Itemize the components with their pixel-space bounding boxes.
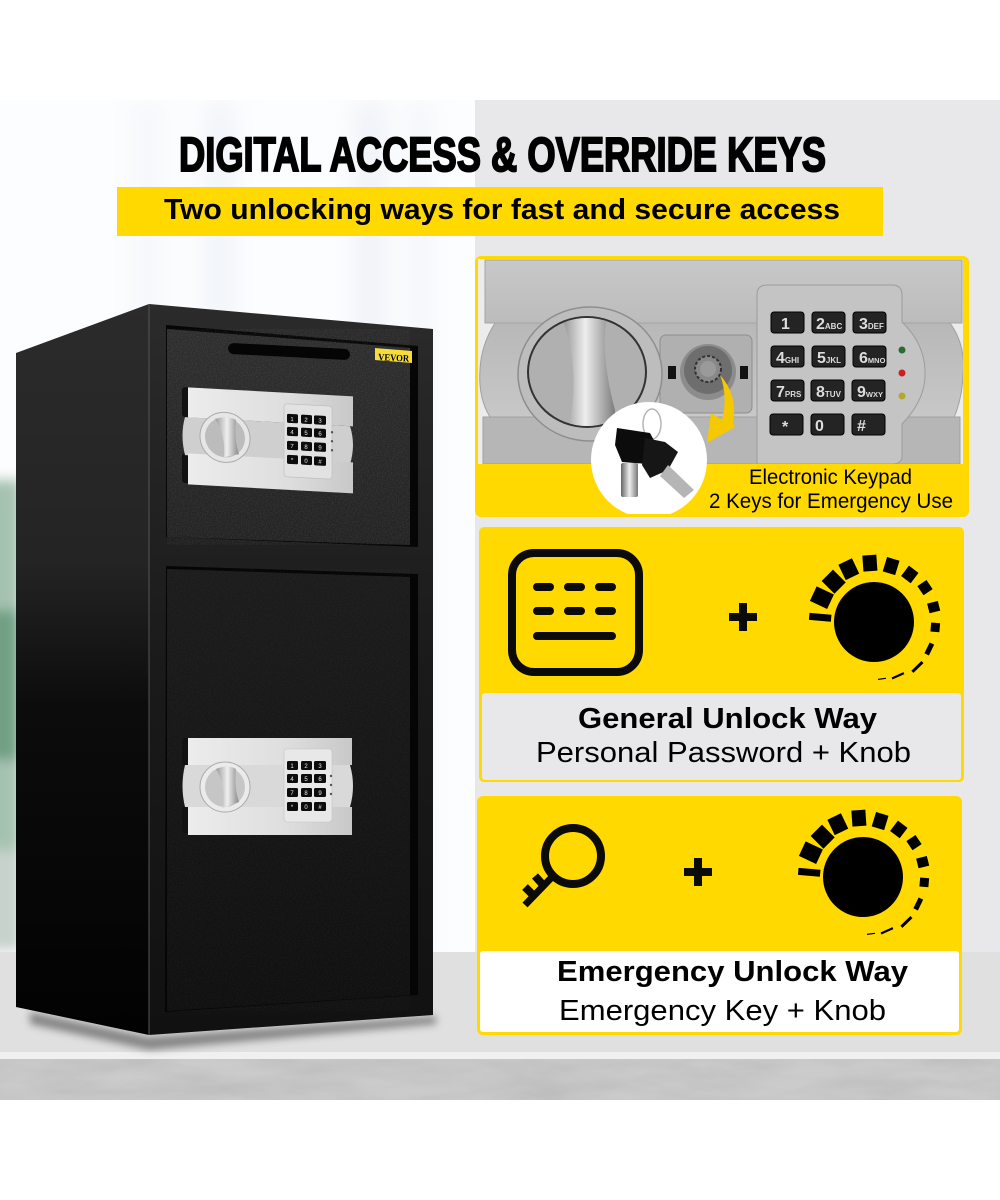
caption: white circle with keys — [591, 402, 707, 518]
panel text: Emergency Unlock Way — [557, 956, 908, 988]
panel text — [557, 956, 908, 1027]
keypad buttons: 2ABC — [816, 316, 842, 333]
panel: general unlock way — [479, 527, 964, 782]
keypad buttons: 1 — [781, 316, 790, 333]
panel text: Personal Password + Knob — [536, 737, 911, 769]
upper door — [166, 325, 418, 547]
keypad buttons: * — [782, 419, 789, 436]
lower lock panel: # — [318, 805, 322, 811]
keypad buttons: # — [857, 418, 866, 435]
upper lock panel: # — [318, 460, 322, 466]
keypad buttons: 9WXY — [857, 384, 883, 401]
caption text — [709, 466, 953, 513]
lower lock panel: 3 — [318, 764, 322, 770]
lower lock panel: 5 — [304, 777, 308, 783]
icon: knob dial — [809, 555, 940, 680]
upper lock panel: 1 — [290, 417, 294, 423]
VEVOR badge — [375, 348, 412, 365]
plus sign — [729, 603, 757, 631]
upper lock panel: * — [291, 458, 294, 464]
lower lock panel — [182, 738, 353, 835]
upper lock panel: 2 — [304, 418, 308, 424]
upper lock panel: 0 — [304, 459, 308, 465]
panel text: General Unlock Way — [578, 703, 877, 735]
status lights — [898, 346, 906, 400]
lower lock panel: 2 — [304, 764, 308, 770]
lower lock panel: 4 — [290, 777, 294, 783]
keypad buttons: 4GHI — [776, 350, 799, 367]
keypad buttons: 0 — [815, 418, 824, 435]
icon: knob dial — [798, 810, 929, 935]
lower lock panel: * — [291, 805, 294, 811]
panel: electronic keypad — [475, 256, 969, 518]
lower lock panel: 6 — [318, 777, 322, 783]
upper lock panel: 6 — [318, 432, 322, 438]
safe — [16, 304, 433, 1035]
lower lock panel: 9 — [318, 791, 322, 797]
subtitle band — [117, 187, 883, 236]
subtitle band: Two unlocking ways for fast and secure access — [164, 194, 840, 226]
arrow: key to lock — [707, 375, 735, 443]
upper lock panel: 7 — [290, 444, 294, 450]
keypad buttons: 3DEF — [859, 316, 884, 333]
upper lock panel: 5 — [304, 431, 308, 437]
lower lock panel: 8 — [304, 791, 308, 797]
panel text: Emergency Key + Knob — [559, 995, 886, 1027]
plus sign — [684, 858, 712, 886]
upper lock panel: 9 — [318, 446, 322, 452]
upper lock panel — [182, 387, 353, 493]
caption text: 2 Keys for Emergency Use — [709, 490, 953, 513]
caption text: Electronic Keypad — [749, 466, 912, 489]
upper lock panel: 3 — [318, 419, 322, 425]
keypad buttons: 7PRS — [776, 384, 802, 401]
safe front face — [149, 304, 433, 1035]
lower lock panel: 1 — [290, 764, 294, 770]
keypad buttons: 6MNO — [859, 350, 886, 367]
upper lock panel: 8 — [304, 445, 308, 451]
lock close-up photo — [480, 260, 963, 464]
lower lock panel: 7 — [290, 791, 294, 797]
lower door — [165, 566, 418, 1012]
lower lock panel: 0 — [304, 805, 308, 811]
upper lock panel: 4 — [290, 430, 294, 436]
keypad buttons: 5JKL — [817, 350, 841, 367]
icon: keypad — [512, 553, 639, 672]
VEVOR badge: VEVOR — [378, 353, 409, 365]
keypad buttons — [770, 312, 886, 436]
panel: emergency unlock way — [477, 796, 962, 1035]
safe side face — [16, 304, 149, 1035]
panel text — [536, 703, 911, 769]
icon: key — [525, 828, 601, 905]
keypad buttons: 8TUV — [816, 384, 842, 401]
